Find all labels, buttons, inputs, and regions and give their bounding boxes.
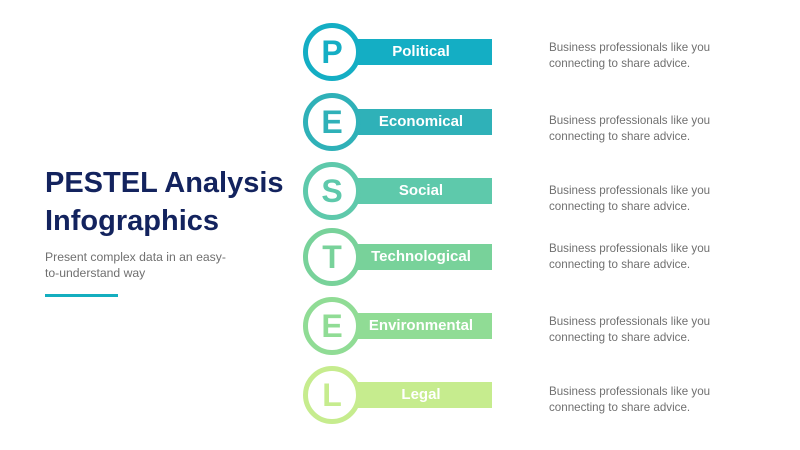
description: social: connecting to share advice. — [549, 200, 690, 213]
circle: P: P — [321, 34, 343, 70]
description: economical: connecting to share advice. — [549, 130, 690, 143]
bar: economical: Economical — [379, 113, 463, 130]
description: technological: Business professionals like you — [549, 242, 710, 255]
row: technological — [303, 228, 492, 286]
circle: S: S — [321, 173, 343, 209]
circle: E — [303, 93, 361, 151]
subtitle: to-understand way — [45, 266, 145, 280]
row: economical — [303, 93, 492, 151]
description: environmental — [549, 315, 710, 344]
bar: technological: Technological — [371, 248, 471, 265]
title: Infographics — [45, 205, 219, 237]
description: political: connecting to share advice. — [549, 57, 690, 70]
description: technological: connecting to share advice. — [549, 258, 690, 271]
description: legal: Business professionals like you — [549, 385, 710, 398]
bar: political: Political — [392, 43, 450, 60]
row: environmental — [303, 297, 492, 355]
circle: S — [303, 162, 361, 220]
description: legal: connecting to share advice. — [549, 401, 690, 414]
bar: social — [340, 178, 492, 204]
accent line — [45, 294, 118, 297]
description: legal — [549, 385, 710, 414]
subtitle — [45, 250, 226, 280]
description: political: Business professionals like you — [549, 41, 710, 54]
bar: economical — [340, 109, 492, 135]
circle: E: E — [321, 104, 343, 140]
title — [45, 167, 284, 237]
bar: environmental — [340, 313, 492, 339]
title: PESTEL Analysis — [45, 167, 284, 199]
circle: L — [303, 366, 361, 424]
row: political — [303, 23, 492, 81]
description: economical: Business professionals like you — [549, 114, 710, 127]
description: economical — [549, 114, 710, 143]
bar: social: Social — [399, 182, 443, 199]
bar: environmental: Environmental — [369, 317, 473, 334]
description: social: Business professionals like you — [549, 184, 710, 197]
circle: T — [303, 228, 361, 286]
bar: political — [340, 39, 492, 65]
circle: E: E — [321, 308, 343, 344]
description: environmental: connecting to share advice. — [549, 331, 690, 344]
bar: legal: Legal — [401, 386, 441, 403]
description: social — [549, 184, 710, 213]
circle: T: T — [322, 239, 342, 275]
bar: legal — [340, 382, 492, 408]
bar: technological — [340, 244, 492, 270]
circle: P — [303, 23, 361, 81]
circle: E — [303, 297, 361, 355]
description: environmental: Business professionals like you — [549, 315, 710, 328]
description: technological — [549, 242, 710, 271]
description: political — [549, 41, 710, 70]
circle: L: L — [322, 377, 342, 413]
row: legal — [303, 366, 492, 424]
row: social — [303, 162, 492, 220]
subtitle: Present complex data in an easy- — [45, 250, 226, 264]
